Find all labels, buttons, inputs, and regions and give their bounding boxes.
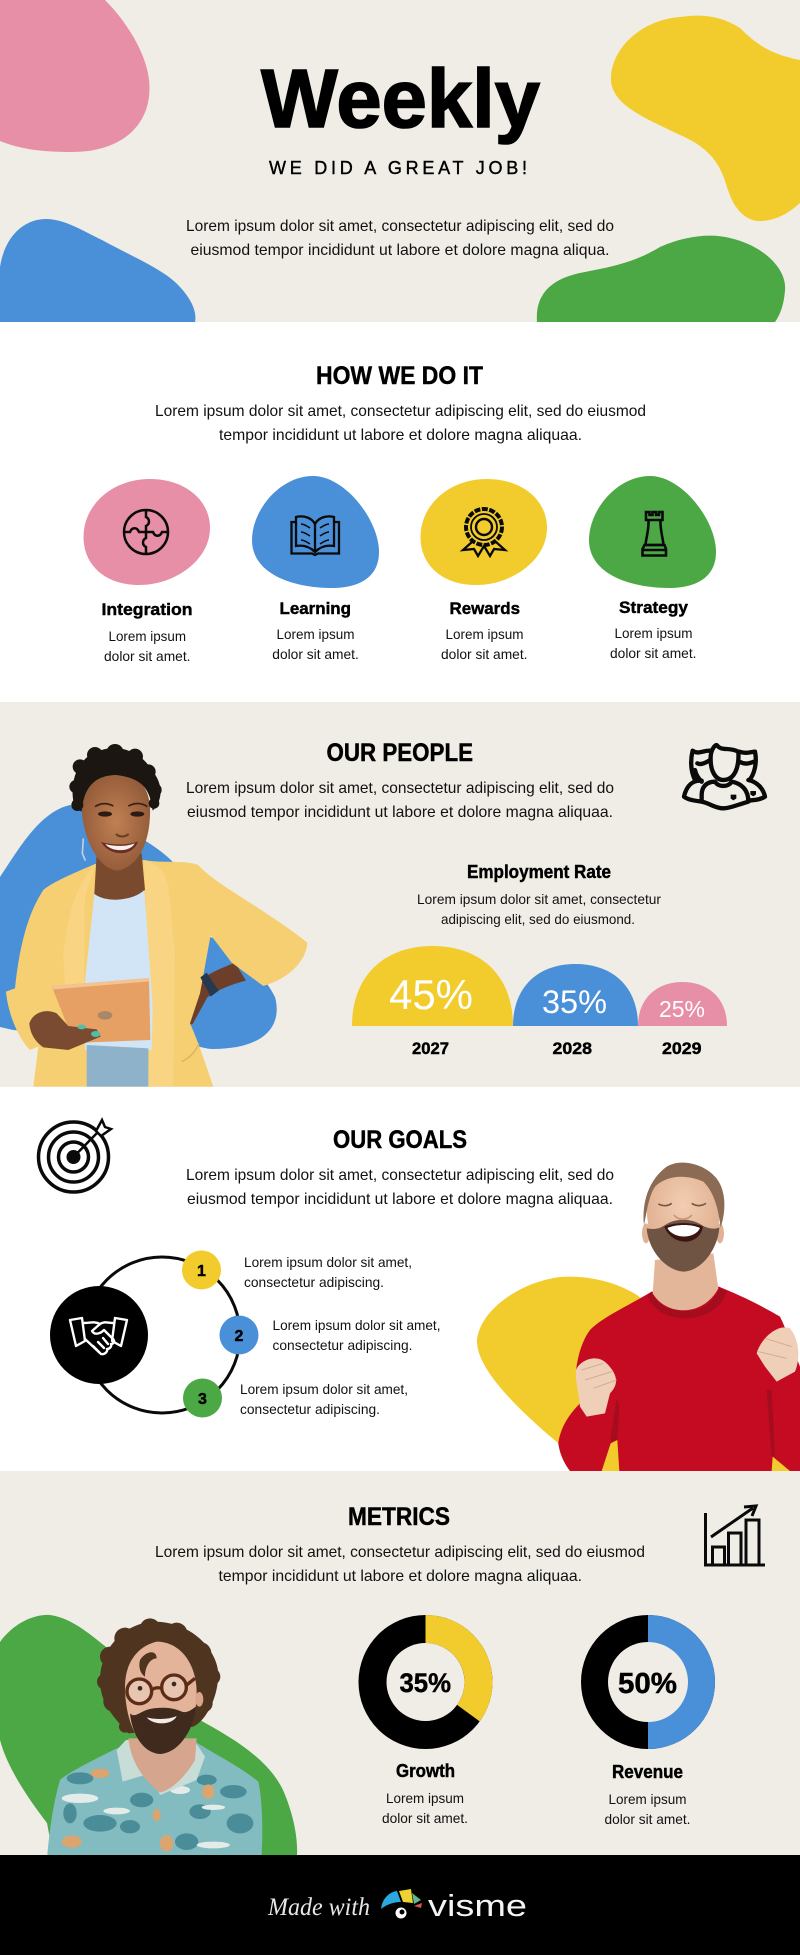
bar: 2029: 2029 — [662, 1039, 702, 1058]
heading: metrics: METRICS — [348, 1503, 450, 1531]
goal text 2: Lorem ipsum dolor sit amet, — [272, 1317, 440, 1333]
caption: growth — [382, 1790, 468, 1826]
heading: employment rate: Employment Rate — [467, 862, 611, 882]
photo: woman with tablet — [6, 744, 307, 1087]
caption: revenue: dolor sit amet. — [604, 1811, 690, 1827]
earring — [82, 838, 85, 861]
node 2 — [220, 1316, 258, 1354]
panel: header — [0, 0, 800, 322]
made with text: Made with — [267, 1894, 370, 1921]
subtitle: WE DID A GREAT JOB! — [269, 158, 527, 178]
panel: metrics — [0, 1471, 800, 1855]
blob: yellow behind man — [477, 1277, 790, 1471]
intro text: Lorem ipsum dolor sit amet, consectetur adipiscing elit, sed do — [186, 218, 614, 235]
label: revenue: Revenue — [612, 1762, 683, 1782]
smile — [101, 841, 138, 853]
panel: footer — [0, 1855, 800, 1955]
blob: pink — [0, 0, 150, 152]
bar: 2029: 25% — [659, 996, 705, 1022]
caption: learning: Lorem ipsum — [276, 626, 354, 642]
caption: strategy: Lorem ipsum — [614, 625, 692, 641]
neck — [128, 1738, 197, 1793]
caption: strategy — [610, 625, 696, 661]
section text: Lorem ipsum dolor sit amet, consectetur adipiscing elit, sed do — [186, 1167, 614, 1184]
collar — [117, 1740, 205, 1795]
label: learning: Learning — [280, 599, 351, 618]
ear — [195, 1692, 203, 1707]
panel: our goals — [0, 1087, 800, 1471]
section text — [155, 403, 646, 444]
sleeve shadows — [610, 1390, 775, 1457]
section text — [186, 780, 614, 821]
label: growth: Growth — [396, 1761, 455, 1781]
section text: eiusmod tempor incididunt ut labore et dolore magna aliquaa. — [187, 804, 613, 821]
caption: revenue: Lorem ipsum — [608, 1791, 686, 1807]
icon: rook — [642, 512, 666, 556]
section text: Lorem ipsum dolor sit amet, consectetur adipiscing elit, sed do eiusmod — [155, 1544, 645, 1561]
shirt — [85, 890, 153, 1050]
caption: rewards — [441, 626, 528, 662]
node 1 — [182, 1250, 221, 1290]
section text: Lorem ipsum dolor sit amet, consectetur adipiscing elit, sed do eiusmod — [155, 403, 646, 420]
eyes — [658, 1203, 706, 1206]
donut: revenue: 50% — [618, 1668, 677, 1700]
fist: left — [576, 1358, 616, 1417]
node 1: 1 — [197, 1263, 206, 1280]
node 3 — [183, 1378, 222, 1418]
section text: tempor incididunt ut labore et dolore magna aliquaa. — [219, 427, 582, 444]
nose — [116, 834, 129, 836]
heading: how we do it: HOW WE DO IT — [316, 362, 483, 390]
title: Weekly — [261, 52, 540, 145]
head — [647, 1170, 720, 1272]
blob: green behind man — [0, 1615, 297, 1855]
label: rewards: Rewards — [450, 599, 520, 618]
node 3: 3 — [198, 1391, 207, 1408]
semicircle chart — [352, 946, 727, 1058]
caption: rewards: dolor sit amet. — [441, 646, 528, 662]
chart text: Lorem ipsum dolor sit amet, consectetur — [417, 891, 661, 907]
blob: yellow — [611, 16, 800, 221]
goal text 1: consectetur adipiscing. — [244, 1274, 384, 1290]
hand — [29, 1011, 101, 1050]
photo: cheering man — [558, 1163, 800, 1471]
smile — [147, 1716, 177, 1723]
jeans — [87, 1045, 148, 1087]
chart text: adipiscing elit, sed do eiusmond. — [441, 911, 635, 927]
visme wordmark: visme — [428, 1888, 527, 1923]
donut: growth: 35% — [400, 1668, 451, 1698]
sweater — [558, 1287, 800, 1471]
eyes — [98, 811, 112, 817]
caption: integration: Lorem ipsum — [108, 628, 186, 644]
donut: growth — [358, 1615, 493, 1749]
bar: 2027: 45% — [389, 971, 473, 1018]
tablet — [52, 978, 150, 1043]
icon: book — [292, 516, 339, 555]
forearm on hip — [188, 963, 246, 1025]
caption: growth: Lorem ipsum — [386, 1790, 464, 1806]
hair — [644, 1163, 724, 1227]
lapel shading — [63, 860, 175, 1087]
jacket — [6, 860, 307, 1087]
bar: 2027: 2027 — [412, 1039, 449, 1058]
icon: people group — [684, 745, 765, 808]
section text: eiusmod tempor incididunt ut labore et dolore magna aliquaa. — [187, 1191, 613, 1208]
item: rewards — [420, 479, 547, 662]
section text — [155, 1544, 645, 1585]
caption: integration: dolor sit amet. — [104, 648, 190, 664]
node 2: 2 — [235, 1328, 244, 1345]
item: learning — [252, 476, 379, 662]
heading: our people: OUR PEOPLE — [326, 739, 473, 767]
blob: green — [537, 236, 785, 322]
blob: blue — [0, 219, 195, 322]
hair — [69, 744, 162, 812]
panel: our people — [0, 702, 800, 1087]
face — [125, 1642, 197, 1753]
mouth — [664, 1223, 703, 1242]
goal text 3 — [240, 1381, 408, 1417]
intro text: eiusmod tempor incididunt ut labore et dolore magna aliqua. — [190, 242, 610, 259]
intro text — [186, 218, 614, 259]
goal text 3: Lorem ipsum dolor sit amet, — [240, 1381, 408, 1397]
bar: 2027 — [352, 946, 513, 1058]
goal text 1: Lorem ipsum dolor sit amet, — [244, 1254, 412, 1270]
goal text 3: consectetur adipiscing. — [240, 1401, 380, 1417]
curl — [139, 1652, 157, 1677]
chart text — [417, 891, 661, 927]
icon: bar chart — [706, 1506, 765, 1565]
goal text 1 — [244, 1254, 412, 1290]
bar: 2029 — [638, 982, 727, 1058]
icon: visme logo — [381, 1889, 422, 1918]
bar: 2028: 2028 — [552, 1039, 592, 1058]
icon: puzzle — [124, 510, 168, 554]
caption: learning — [272, 626, 359, 662]
caption: rewards: Lorem ipsum — [446, 626, 524, 642]
caption: strategy: dolor sit amet. — [610, 645, 696, 661]
neck and chest — [94, 853, 145, 900]
photo: man with glasses — [47, 1618, 262, 1855]
collar — [647, 1287, 727, 1318]
section text: tempor incididunt ut labore et dolore magna aliquaa. — [218, 1568, 582, 1585]
shirt — [47, 1742, 262, 1855]
bar: 2028: 35% — [542, 984, 607, 1020]
label: integration: Integration — [102, 600, 192, 619]
section text: Lorem ipsum dolor sit amet, consectetur adipiscing elit, sed do — [186, 780, 614, 797]
shirt pattern — [63, 1772, 253, 1850]
donut: revenue — [581, 1615, 715, 1749]
watch — [200, 973, 219, 997]
item: strategy — [589, 476, 716, 661]
hair back — [97, 1618, 220, 1733]
ears — [642, 1223, 650, 1243]
blob: blue behind woman — [0, 805, 277, 1049]
bar: 2028 — [513, 964, 638, 1058]
caption: integration — [104, 628, 190, 664]
jacket front crease — [182, 1043, 199, 1062]
beard — [130, 1707, 196, 1754]
section text — [186, 1167, 614, 1208]
beard — [647, 1220, 719, 1272]
icon: medal — [463, 509, 505, 556]
goal text 2: consectetur adipiscing. — [272, 1337, 412, 1353]
fist: right — [757, 1327, 798, 1382]
label: strategy: Strategy — [619, 598, 689, 617]
hub: handshake — [50, 1286, 148, 1384]
neck — [653, 1253, 718, 1310]
icon: target — [38, 1120, 111, 1192]
face — [82, 773, 150, 871]
panel: how we do it — [0, 322, 800, 702]
caption: growth: dolor sit amet. — [382, 1810, 468, 1826]
caption: learning: dolor sit amet. — [272, 646, 359, 662]
item: integration — [84, 479, 210, 664]
heading: our goals: OUR GOALS — [333, 1126, 467, 1154]
goals diagram — [50, 1250, 258, 1418]
glasses — [127, 1675, 195, 1704]
goal text 2 — [272, 1317, 440, 1353]
caption: revenue — [604, 1791, 690, 1827]
